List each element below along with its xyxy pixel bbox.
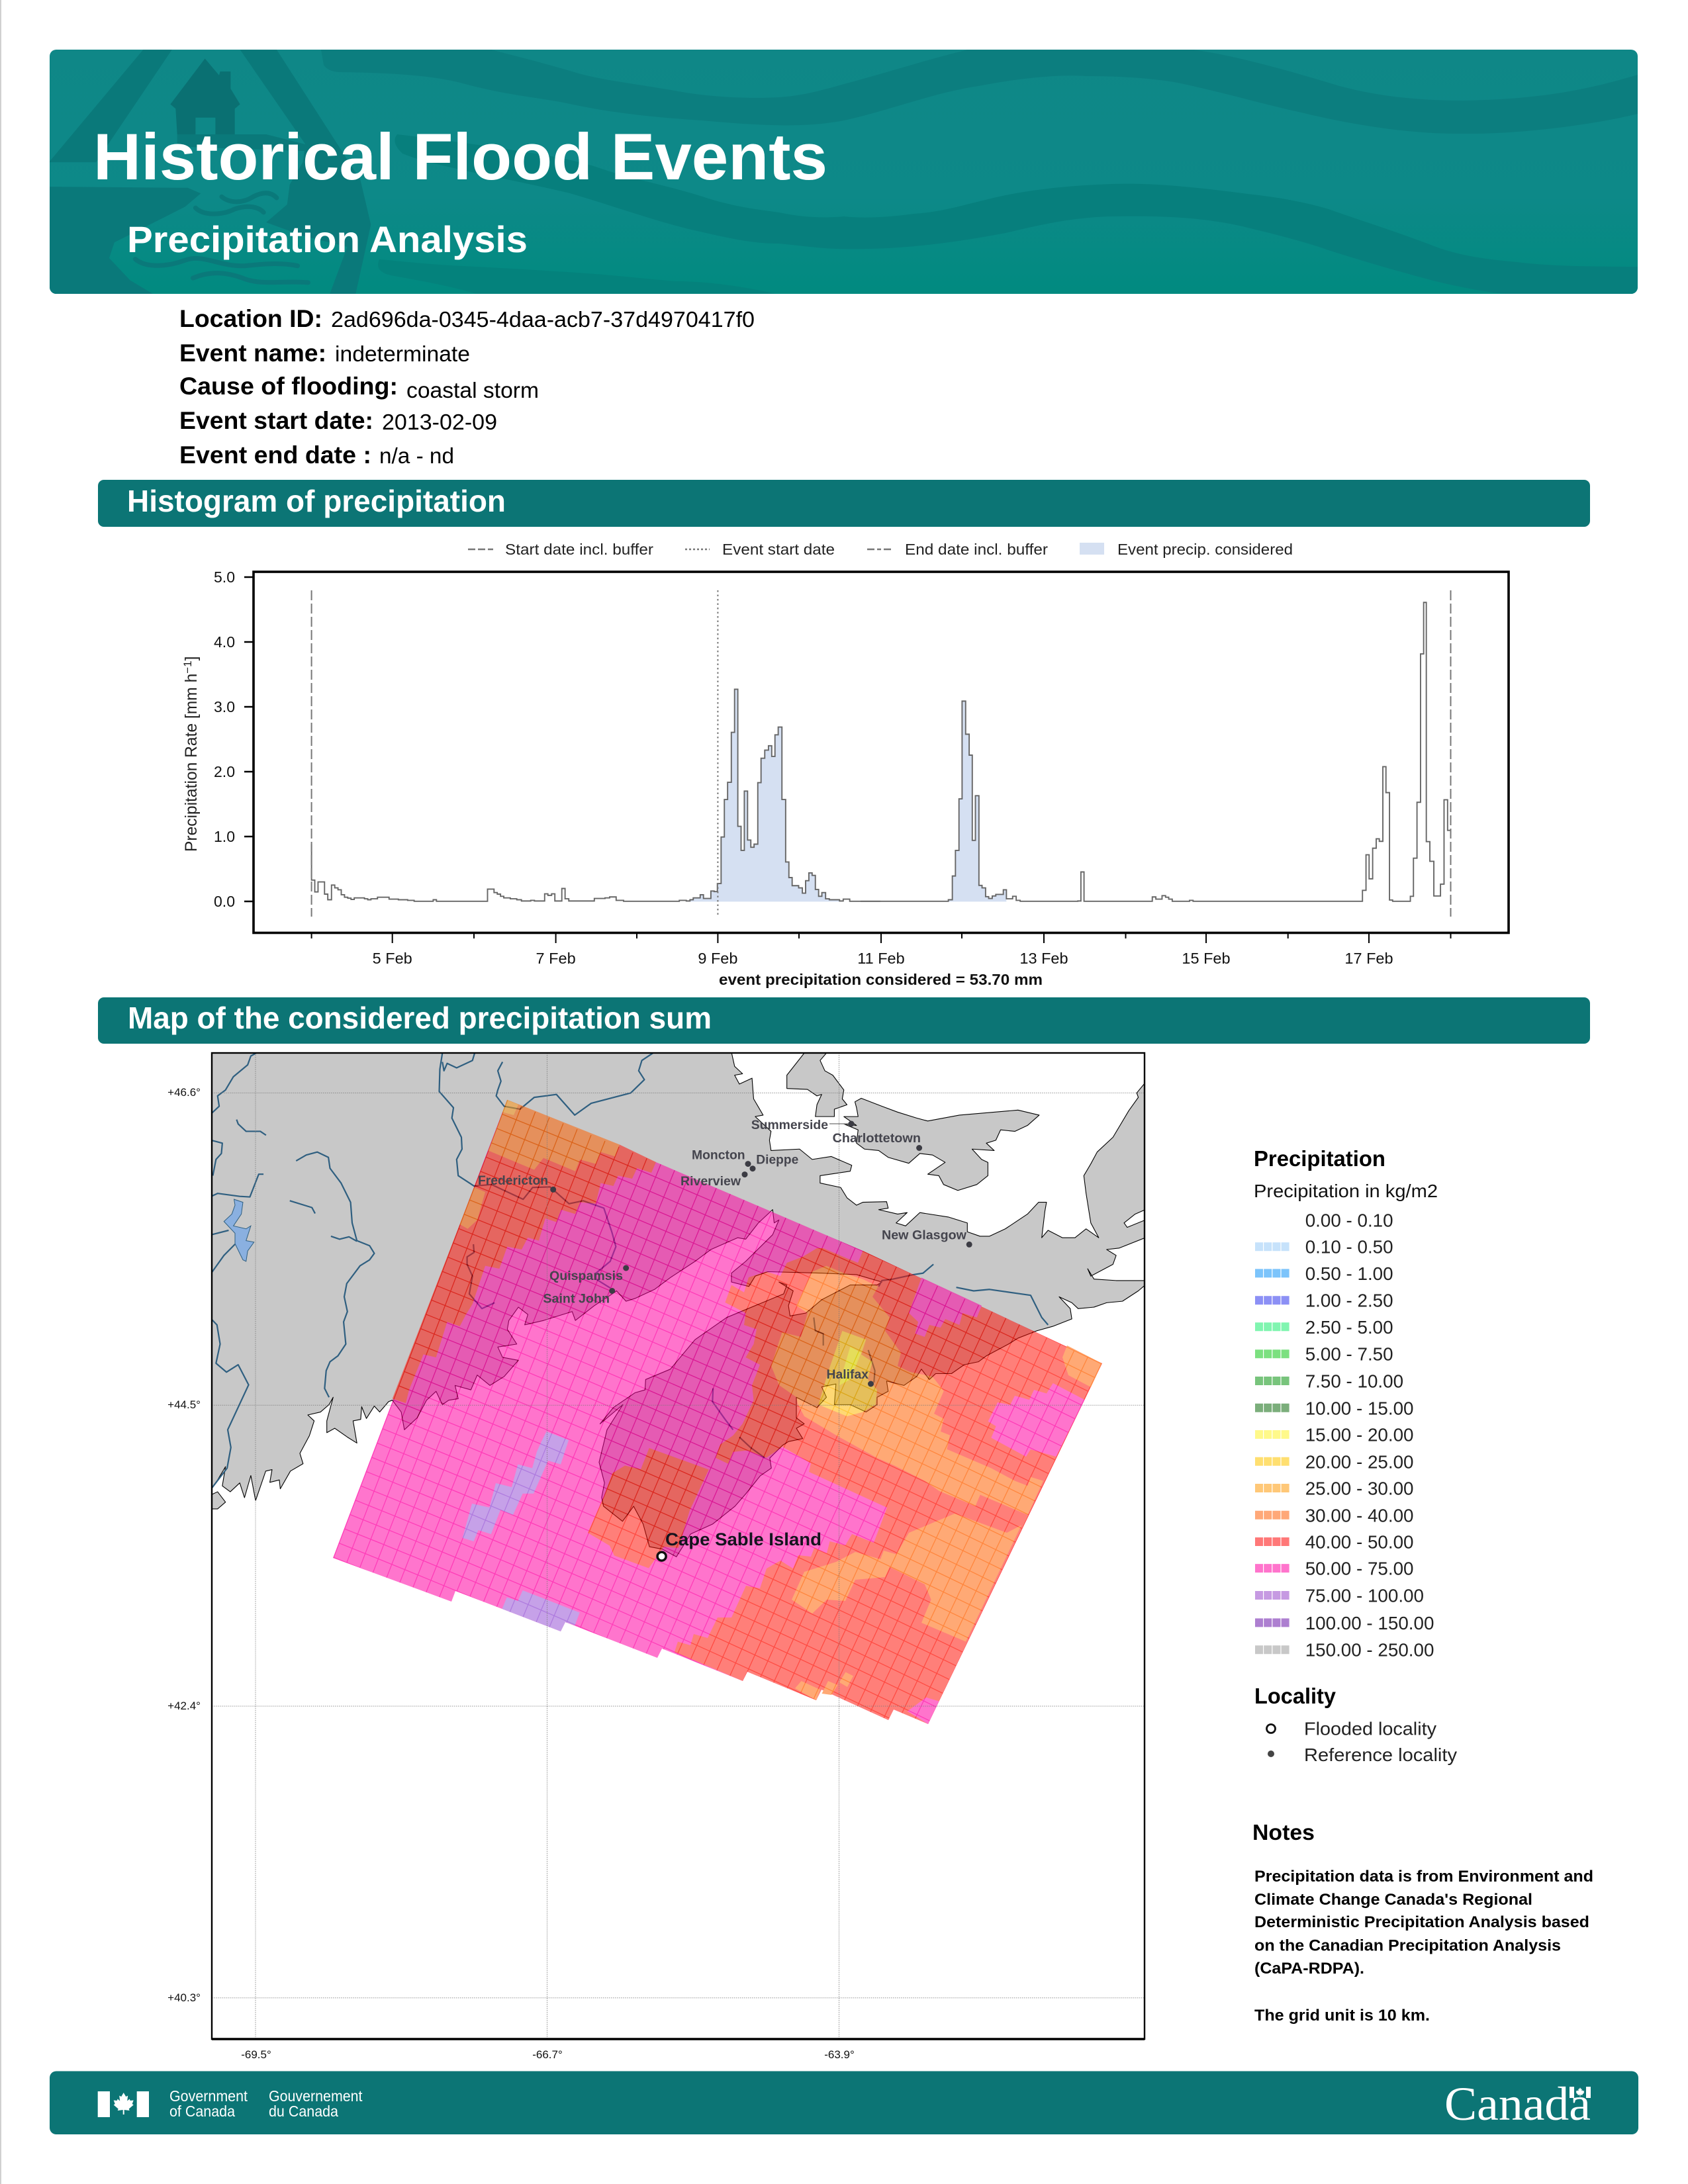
- y axis tick labels: 0.0: [214, 893, 235, 910]
- precipitation map: [167, 1052, 1145, 2061]
- locality legend: Locality: [1254, 1684, 1336, 1708]
- section heading: histogram: [98, 480, 1590, 527]
- banner wave: middle band: [395, 134, 1638, 294]
- event metadata text block: Location ID:: [179, 305, 322, 332]
- footer band: [50, 2071, 1638, 2134]
- flooded locality marker: Cape Sable Island: Cape Sable Island: [665, 1529, 821, 1549]
- event metadata text block: indeterminate: [335, 342, 470, 367]
- lake: [224, 1199, 254, 1261]
- locality: Halifax: Halifax: [826, 1367, 868, 1382]
- 25-30 kg/m2 corner cell: [502, 1100, 518, 1115]
- chart legend: Start date incl. buffer: [505, 541, 653, 558]
- longitude labels: -66.7°: [532, 2048, 563, 2061]
- longitude labels: [241, 2048, 855, 2061]
- x axis tick labels: [373, 950, 1393, 967]
- legend class labels: 30.00 - 40.00: [1305, 1505, 1414, 1525]
- legend class labels: 75.00 - 100.00: [1305, 1586, 1424, 1606]
- locality: Halifax: [826, 1367, 874, 1387]
- histogram chart: [181, 541, 1509, 988]
- event metadata text block: Event name:: [179, 340, 326, 367]
- precipitation legend: [1254, 1146, 1438, 1661]
- event metadata text block: Event end date :: [179, 441, 371, 469]
- locality legend: Reference locality: [1304, 1745, 1457, 1765]
- locality: Moncton: [692, 1148, 751, 1167]
- locality: Dieppe: Dieppe: [756, 1153, 798, 1167]
- latitude labels: +44.5°: [167, 1398, 201, 1411]
- notes block: Deterministic Precipitation Analysis based: [1254, 1913, 1589, 1931]
- notes block: Precipitation data is from Environment and: [1254, 1868, 1593, 1886]
- y axis tick labels: 4.0: [214, 633, 235, 651]
- chart legend: Event start date: [722, 541, 835, 558]
- icon: Government of Canada flag: [98, 2091, 149, 2117]
- banner wave: top band: [321, 50, 1638, 134]
- chart legend: Event precip. considered: [1117, 541, 1293, 558]
- Canada wordmark: Canada: [1444, 2077, 1591, 2130]
- x axis tick labels: 9 Feb: [698, 950, 737, 967]
- legend class labels: 20.00 - 25.00: [1305, 1451, 1414, 1472]
- chart legend: End date incl. buffer: [905, 541, 1048, 558]
- y axis title: −1: [181, 660, 194, 674]
- chart frame and axes: [244, 572, 1509, 943]
- event metadata text block: 2013-02-09: [382, 410, 497, 435]
- banner logo: drop and house: [49, 50, 371, 296]
- notes block: Notes: [1252, 1820, 1315, 1844]
- precipitation step line: [312, 602, 1451, 901]
- y axis title: ]: [183, 656, 201, 660]
- 50-75 kg/m2 base area: [333, 1100, 1102, 1724]
- legend class labels: 15.00 - 20.00: [1305, 1424, 1414, 1445]
- x axis tick labels: 17 Feb: [1344, 950, 1393, 967]
- longitude labels: -69.5°: [241, 2048, 271, 2061]
- legend class labels: 0.00 - 0.10: [1305, 1210, 1393, 1231]
- 50-75 kg/m2 islands: [908, 1277, 1084, 1724]
- rivers: [211, 1053, 1048, 1489]
- legend subtitle: Precipitation in kg/m2: [1254, 1181, 1438, 1201]
- government wordmark: du Canada: [269, 2103, 339, 2120]
- latitude labels: +40.3°: [167, 1991, 201, 2004]
- legend class labels: 1.00 - 2.50: [1305, 1291, 1393, 1311]
- buffer and event date lines: [312, 590, 1451, 917]
- legend class labels: [1305, 1210, 1434, 1661]
- locality legend: [1254, 1684, 1457, 1765]
- legend class labels: 5.00 - 7.50: [1305, 1344, 1393, 1365]
- government wordmark: [169, 2087, 363, 2120]
- section heading: histogram: Histogram of precipitation: [127, 484, 506, 518]
- icon: reference locality: [1268, 1751, 1274, 1757]
- locality: New Glasgow: New Glasgow: [882, 1228, 967, 1242]
- locality: Fredericton: [478, 1173, 556, 1193]
- locality: Charlottetown: Charlottetown: [833, 1131, 921, 1146]
- locality: Fredericton: Fredericton: [478, 1173, 548, 1188]
- locality: Riverview: Riverview: [680, 1174, 741, 1189]
- header banner: [49, 50, 1638, 296]
- locality: Quispamsis: Quispamsis: [549, 1269, 623, 1283]
- event metadata text block: coastal storm: [406, 379, 539, 403]
- event precipitation total: event precipitation considered = 53.70 mm: [719, 971, 1043, 988]
- longitude labels: -63.9°: [824, 2048, 855, 2061]
- event metadata text block: Event start date:: [179, 407, 373, 434]
- legend class labels: 2.50 - 5.00: [1305, 1317, 1393, 1338]
- precipitation grid colour classes: [333, 1100, 1102, 1724]
- locality: New Glasgow: [882, 1228, 972, 1248]
- event metadata text block: [179, 305, 755, 469]
- legend title: Precipitation: [1254, 1146, 1385, 1171]
- 15-20 kg/m2 cells: [839, 1347, 861, 1385]
- legend class labels: 7.50 - 10.00: [1305, 1371, 1403, 1391]
- legend class labels: 0.10 - 0.50: [1305, 1237, 1393, 1257]
- government wordmark: Government: [169, 2087, 248, 2105]
- legend class labels: 10.00 - 15.00: [1305, 1398, 1414, 1418]
- 20-25 kg/m2 cells: [818, 1331, 877, 1416]
- 30-40 kg/m2 cells: [460, 1100, 1102, 1700]
- notes block: Climate Change Canada's Regional: [1254, 1891, 1532, 1909]
- x axis tick labels: 13 Feb: [1019, 950, 1068, 967]
- notes block: [1252, 1820, 1593, 2025]
- x axis tick labels: 5 Feb: [373, 950, 412, 967]
- y axis title: Precipitation Rate [mm h: [183, 674, 201, 852]
- 75-100 kg/m2 cells: [463, 1432, 580, 1631]
- locality legend: Flooded locality: [1304, 1719, 1436, 1739]
- 40-50 kg/m2 cells: [393, 1145, 1102, 1724]
- reference localities: [478, 1118, 972, 1387]
- locality: Summerside: Summerside: [751, 1118, 828, 1132]
- locality: Saint John: Saint John: [543, 1291, 610, 1306]
- section heading: map: Map of the considered precipitation sum: [128, 1001, 712, 1035]
- section heading: map: [98, 997, 1590, 1044]
- subtitle: Precipitation Analysis: [127, 218, 528, 260]
- notes block: on the Canadian Precipitation Analysis: [1254, 1937, 1561, 1955]
- chart legend: [468, 541, 1293, 558]
- y axis tick labels: 1.0: [214, 828, 235, 845]
- shaded event precipitation: [679, 689, 1006, 901]
- legend class labels: 40.00 - 50.00: [1305, 1531, 1414, 1553]
- y axis tick labels: 3.0: [214, 698, 235, 715]
- y axis tick labels: 5.0: [214, 569, 235, 586]
- legend class labels: 150.00 - 250.00: [1305, 1640, 1434, 1661]
- x axis tick labels: 15 Feb: [1182, 950, 1231, 967]
- event metadata text block: Cause of flooding:: [179, 373, 398, 400]
- event metadata text block: n/a - nd: [379, 444, 454, 469]
- legend swatches: [1255, 1247, 1289, 1650]
- government wordmark: of Canada: [169, 2103, 236, 2120]
- notes block: (CaPA-RDPA).: [1254, 1960, 1364, 1978]
- flooded locality marker: Cape Sable Island: [657, 1529, 821, 1561]
- notes block: The grid unit is 10 km.: [1254, 2007, 1430, 2025]
- grid cell lines: [310, 1090, 1109, 1883]
- x axis tick labels: 7 Feb: [536, 950, 576, 967]
- legend class labels: 25.00 - 30.00: [1305, 1479, 1414, 1498]
- land masses: [211, 1052, 1145, 1557]
- latitude labels: +42.4°: [167, 1700, 201, 1712]
- title: Historical Flood Events: [93, 120, 827, 193]
- y axis tick labels: 2.0: [214, 763, 235, 780]
- latitude labels: +46.6°: [167, 1086, 201, 1099]
- banner wave: bottom band: [380, 262, 759, 294]
- government wordmark: Gouvernement: [269, 2087, 363, 2105]
- icon: flooded locality: [1267, 1725, 1275, 1733]
- x axis tick labels: 11 Feb: [857, 950, 905, 967]
- latitude labels: [167, 1086, 201, 2004]
- legend class labels: 100.00 - 150.00: [1305, 1613, 1434, 1633]
- legend class labels: 50.00 - 75.00: [1305, 1559, 1414, 1579]
- legend class labels: 0.50 - 1.00: [1305, 1263, 1393, 1284]
- map frame: [212, 1053, 1145, 2039]
- y axis tick labels: [214, 569, 235, 910]
- locality: Moncton: Moncton: [692, 1148, 745, 1162]
- locality: Dieppe: [749, 1153, 798, 1171]
- event metadata text block: 2ad696da-0345-4daa-acb7-37d4970417f0: [331, 308, 755, 332]
